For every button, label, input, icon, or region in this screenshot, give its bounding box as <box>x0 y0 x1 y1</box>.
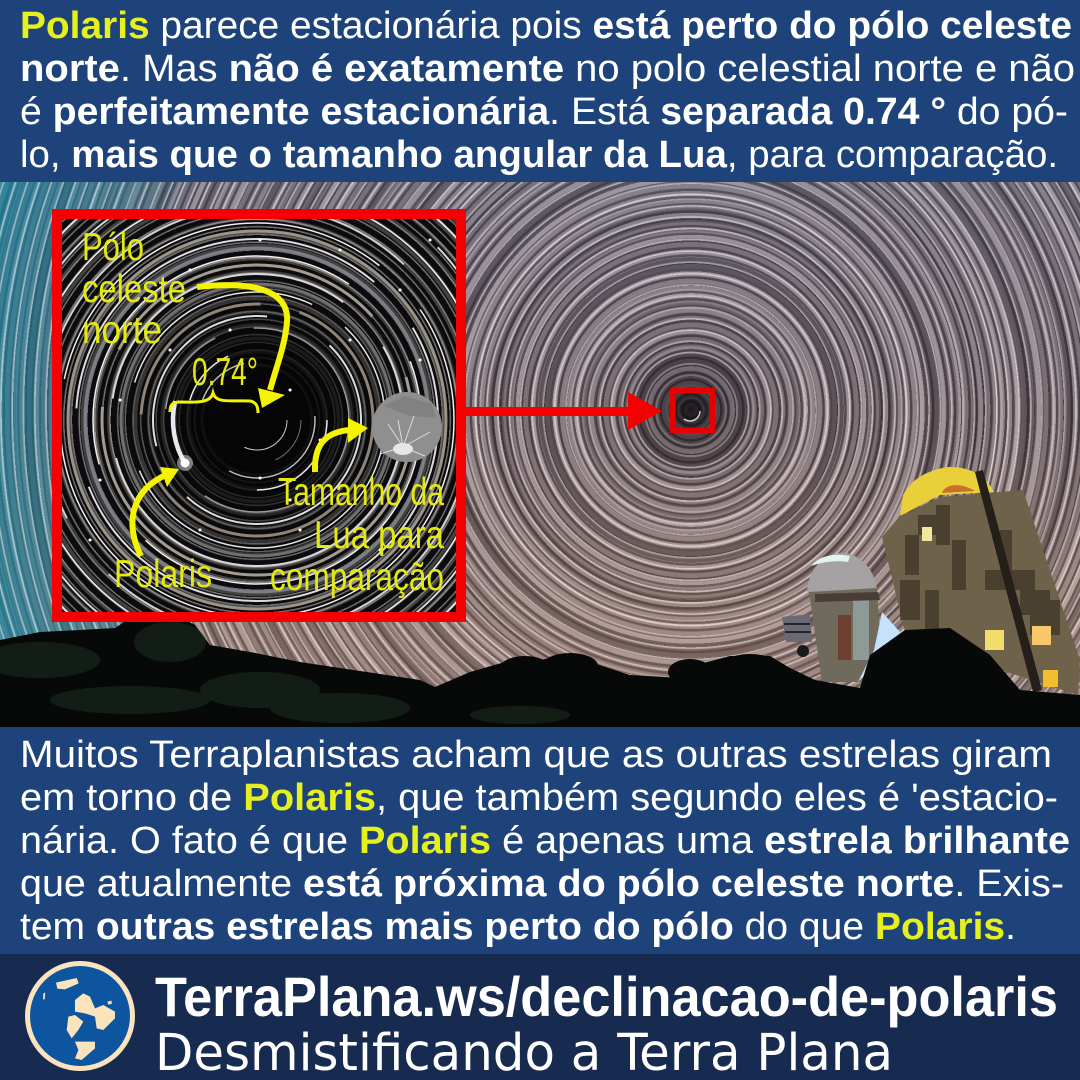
panel: bottom explanation text: nária. O fato é que Polaris é apenas uma estrela brilhante <box>20 820 1070 862</box>
inset background: magnified star trails <box>62 219 456 612</box>
panel: top explanation text: Polaris parece estacionária pois está perto do pólo celeste <box>20 5 1072 47</box>
arrow: from inset to celestial pole marker <box>466 388 715 433</box>
brace: 0.74 degrees <box>170 393 258 413</box>
panel: bottom explanation text: em torno de Polaris, que também segundo eles é 'estacio- <box>20 777 1058 819</box>
handwritten labels: celeste <box>82 268 186 311</box>
panel: bottom explanation text: Muitos Terraplanistas acham que as outras estrelas giram <box>20 734 1052 776</box>
handwritten labels: Lua para <box>314 514 444 557</box>
antenna board <box>782 614 812 657</box>
small observatory <box>807 553 900 682</box>
inset panel: magnified celestial pole <box>52 209 466 622</box>
bushes with green tint <box>0 622 570 724</box>
panel: bottom explanation text: que atualmente está próxima do pólo celeste norte . Exis- <box>20 863 1064 905</box>
arrow: to Moon <box>315 418 368 472</box>
handwritten labels: 0.74° <box>192 351 258 394</box>
panel: top explanation text: é perfeitamente estacionária . Está separada 0.74 ° do pó- <box>20 91 1068 133</box>
handwritten labels: norte <box>82 309 162 352</box>
star trail ends <box>90 240 430 570</box>
icon: flat earth globe logo <box>25 961 135 1071</box>
Polaris thick arc <box>170 400 185 461</box>
inset red frame <box>57 214 461 617</box>
moon for comparison <box>372 392 442 462</box>
tree line silhouette <box>0 612 1080 727</box>
large observatory tower <box>882 467 1080 695</box>
arrow: pole label to pole <box>197 285 287 408</box>
handwritten labels: Polaris <box>114 553 212 596</box>
panel: footer <box>0 954 1080 1080</box>
panel: top explanation text: norte. Mas não é exatamente no polo celestial norte e não <box>20 48 1075 90</box>
handwritten labels <box>82 226 444 599</box>
polaris star glow <box>177 455 193 471</box>
panel: bottom explanation text <box>0 727 1080 954</box>
inset star trails <box>62 219 456 612</box>
photo: foreground with observatories and trees <box>0 467 1080 727</box>
handwritten labels: Pólo <box>82 226 144 269</box>
panel: top explanation text: lo, mais que o tamanho angular da Lua, para comparação. <box>20 134 1058 176</box>
arrow: to Polaris <box>132 467 179 556</box>
panel: bottom explanation text: tem outras estrelas mais perto do pólo do que Polaris. <box>20 906 1016 948</box>
photo: star trails sky <box>0 182 1080 727</box>
panel: top explanation text <box>0 0 1080 182</box>
